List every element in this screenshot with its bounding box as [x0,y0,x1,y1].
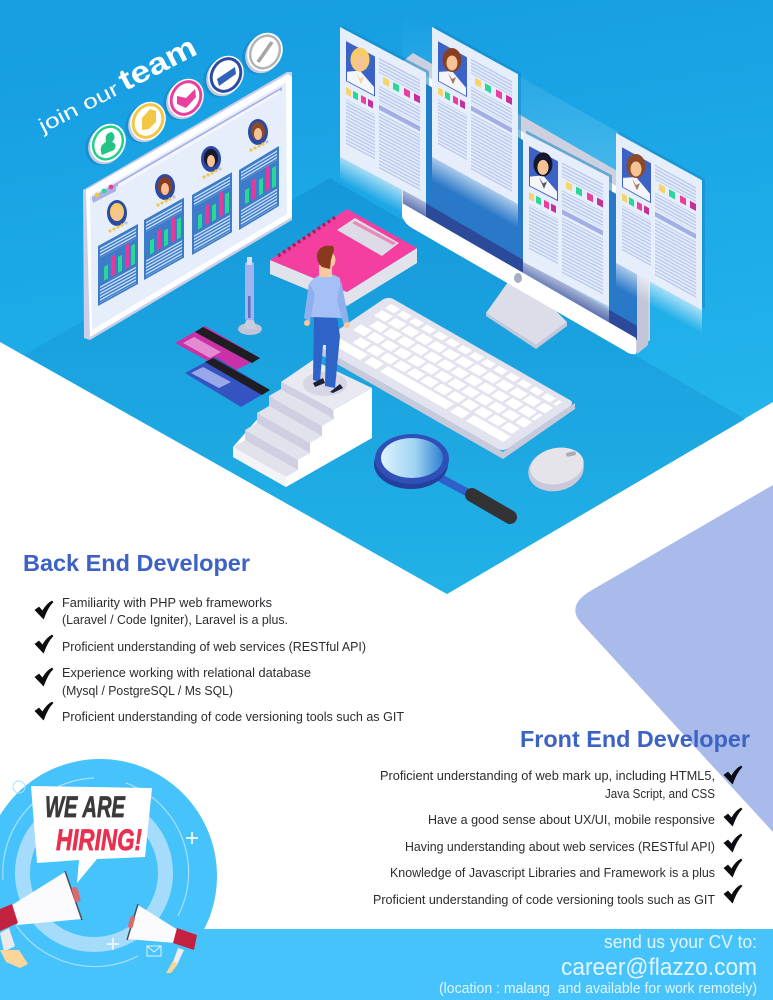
card: candidate 3 [192,146,232,255]
monitor [402,53,650,354]
icon: yellow phone [118,95,173,150]
requirement 3: Experience working with relational database [62,666,311,680]
requirement 1 [62,596,288,627]
hiring badge circle [0,759,217,993]
card: candidate 2 [144,174,184,280]
computer mouse [524,443,588,496]
text: HIRING!: HIRING! [56,824,142,857]
speech bubble [31,786,152,883]
icon row [78,26,290,172]
requirement 1: (Laravel / Code Igniter), Laravel is a plus. [62,613,288,627]
glow above monitor [402,10,650,195]
icon: blue credit card [185,357,270,407]
requirement 3: (Mysql / PostgreSQL / Ms SQL) [62,684,233,698]
icon: pen [238,257,262,335]
hiring badge illustration [0,778,198,973]
megaphone left [0,871,82,968]
requirement 1: Familiarity with PHP web frameworks [62,596,272,610]
requirement 4: Proficient understanding of code versioning tools such as GIT [62,710,404,724]
title: join our team: join our [34,78,123,138]
resume sheet 3 [523,129,612,332]
list: front end requirements [373,766,742,907]
icon: pink notebook [270,209,417,306]
isometric desk floor [24,178,745,594]
icon: pink book [156,72,211,127]
check 3 [724,834,742,852]
card: candidate 1 [98,200,138,306]
resume sheet 1 [340,24,429,228]
text: WE ARE: WE ARE [45,791,126,824]
check 5 [724,885,742,903]
icon: grey wrench [235,26,290,81]
requirement 4: Knowledge of Javascript Libraries and Framework is a plus [390,866,715,880]
list: back end requirements [35,596,404,724]
requirement 1 [380,769,715,801]
icon: pink credit card [175,326,260,373]
man standing [304,246,350,393]
resume sheet 2 [432,24,521,230]
staircase [233,360,372,487]
requirement 3 [62,666,311,698]
card: candidate 4 [239,119,279,230]
magnifying glass [374,434,510,517]
icon: blue briefcase [196,49,251,104]
title: join our team: team [113,30,202,97]
check 1 [724,766,742,784]
heading: Back End Developer: Back End Developer [23,550,250,576]
footer text: call to action: send us your CV to: [604,932,757,952]
blue hero background [0,0,773,594]
requirement 1: Java Script, and CSS [605,787,715,801]
check 4 [35,702,53,720]
footer text: call to action: (location : malang and available for work remotely) [439,981,757,997]
heading: Front End Developer: Front End Developer [520,726,750,752]
decorative periwinkle shape [575,485,773,832]
check 3 [35,668,53,686]
resume sheet 4 [616,130,705,336]
requirement 3: Having understanding about web services (RESTful API) [405,840,715,854]
footer text: call to action [439,932,757,997]
megaphone right [127,904,197,973]
check 2 [35,635,53,653]
title: join our team [30,30,202,140]
check 2 [724,808,742,826]
icon: envelope [147,946,161,956]
check 1 [35,601,53,619]
requirement 5: Proficient understanding of code versioning tools such as GIT [373,893,715,907]
requirement 2: Proficient understanding of web services (RESTful API) [62,640,366,654]
panel: candidate browser window [83,72,292,340]
requirement 2: Have a good sense about UX/UI, mobile responsive [428,813,715,827]
icon: green person [78,117,133,172]
check 4 [724,859,742,877]
monitor stand [486,275,567,349]
footer bar [0,929,773,1000]
requirement 1: Proficient understanding of web mark up, including HTML5, [380,769,715,783]
keyboard [316,296,575,459]
footer text: call to action: career@flazzo.com [561,954,757,981]
monitor logo [514,273,522,283]
